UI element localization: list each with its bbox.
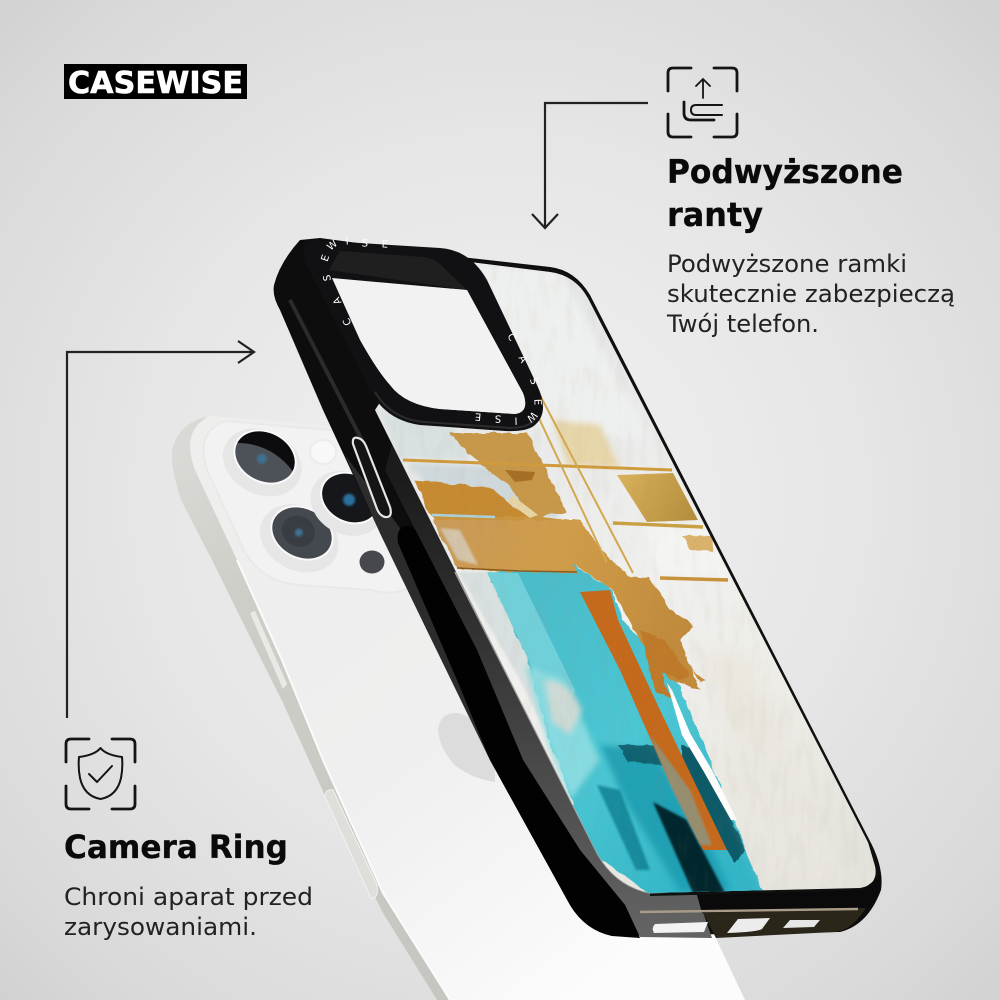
text: raised edges description: skutecznie zabezpieczą xyxy=(667,280,955,308)
camera plateau xyxy=(204,421,415,593)
apple logo xyxy=(438,713,495,782)
thin inner rim xyxy=(470,260,877,895)
white tear xyxy=(667,683,737,820)
bright strip bottom right xyxy=(711,766,850,890)
lip highlight xyxy=(640,909,858,912)
flash xyxy=(310,440,336,464)
text: camera ring description: Chroni aparat przed xyxy=(64,883,313,911)
upper left gold block xyxy=(415,480,533,517)
orange stripe xyxy=(580,590,727,850)
ring lettering left: I xyxy=(345,236,349,248)
case black body xyxy=(274,238,882,936)
camera window xyxy=(332,278,525,414)
side slot and lower black band xyxy=(398,526,640,938)
heading: raised edges: Podwyższone xyxy=(667,152,903,191)
brush texture xyxy=(494,268,813,880)
ring lettering left: W xyxy=(325,238,340,253)
text: raised edges description xyxy=(666,250,955,338)
deep teal shade xyxy=(600,745,730,892)
text: camera ring description xyxy=(64,883,313,941)
pale blue gap in gold xyxy=(432,515,495,517)
gold block right xyxy=(617,473,698,522)
ring lettering right: A xyxy=(516,354,529,365)
white phone xyxy=(172,415,745,1000)
icon: raised edges xyxy=(668,68,737,137)
port: speaker holes xyxy=(653,922,708,933)
logo: CASEWISE: CASEWISE xyxy=(68,66,243,101)
gold underlay xyxy=(421,485,644,645)
pale brush panels xyxy=(474,262,584,356)
ring lettering right: C xyxy=(505,332,518,343)
ring edge gloss xyxy=(375,392,538,428)
phone edge highlight xyxy=(237,560,450,1000)
phone power button xyxy=(325,790,377,898)
ring lettering left: E xyxy=(381,239,389,251)
heading: camera ring: Camera Ring xyxy=(64,828,288,866)
lens: bottom xyxy=(248,491,350,585)
arrow: raised edges pointer xyxy=(532,103,648,228)
heading: raised edges: ranty xyxy=(667,195,763,234)
lighter teal strip xyxy=(487,572,575,697)
diagonal gold lines xyxy=(539,393,634,574)
side button outline xyxy=(353,438,391,517)
teal block xyxy=(487,565,763,895)
ring lettering right: I xyxy=(514,414,518,426)
case left gloss xyxy=(290,300,368,452)
arrow: camera ring pointer xyxy=(67,341,254,718)
ring lettering left: S xyxy=(322,274,334,282)
outer dark strip xyxy=(345,455,490,760)
lidar sensor xyxy=(360,550,384,574)
main gold smear xyxy=(433,520,700,690)
text: camera ring description: zarysowaniami. xyxy=(64,913,257,941)
phone volume button xyxy=(250,611,287,689)
camera ring xyxy=(304,240,543,431)
painted artwork panel xyxy=(375,262,876,893)
bottom dark lip xyxy=(703,908,866,938)
ring lettering left: S xyxy=(361,238,369,250)
art base xyxy=(375,262,876,893)
ring inner bevel xyxy=(329,251,467,290)
clear case xyxy=(274,236,900,938)
upper gold shapes xyxy=(415,433,714,700)
top gold smear xyxy=(450,433,567,517)
gold line three xyxy=(660,578,728,580)
gold bottom ragged edge xyxy=(457,568,577,572)
ring lettering right xyxy=(474,332,543,426)
ring lettering right: E xyxy=(474,410,482,422)
dark brush streak xyxy=(653,802,725,893)
gray patches in gold xyxy=(440,528,478,565)
ring lettering left: C xyxy=(341,316,354,327)
ring lettering left xyxy=(320,236,389,327)
text: raised edges description: Twój telefon. xyxy=(666,310,819,338)
lens: right xyxy=(299,458,395,548)
lens: top xyxy=(211,415,313,509)
dark splatter right of orange xyxy=(680,745,745,862)
ring lettering right: W xyxy=(524,409,539,424)
warm cream patch xyxy=(699,657,757,725)
heading: raised edges xyxy=(667,152,903,234)
art edge highlight line xyxy=(455,572,650,893)
phone back face xyxy=(190,416,745,1000)
gold line two xyxy=(613,523,703,527)
icon: shield xyxy=(66,739,135,809)
gold highlight flecks xyxy=(508,495,538,518)
pale wash lower-left xyxy=(525,665,600,800)
inner gray stripe xyxy=(385,445,712,938)
ring lettering left: A xyxy=(331,295,344,306)
ring lettering right: E xyxy=(531,399,543,405)
phone side band xyxy=(172,417,470,1000)
teal underlay xyxy=(582,824,758,893)
gold splashes xyxy=(682,535,714,552)
ring lettering right: S xyxy=(527,376,539,386)
gold line one xyxy=(403,460,672,470)
text: raised edges description: Podwyższone ramki xyxy=(667,250,907,278)
ring lettering left: E xyxy=(320,254,332,263)
port: charging xyxy=(727,918,770,933)
bottom black band xyxy=(697,876,881,913)
ring lettering right: S xyxy=(495,412,502,424)
port: microphone holes xyxy=(783,920,820,928)
